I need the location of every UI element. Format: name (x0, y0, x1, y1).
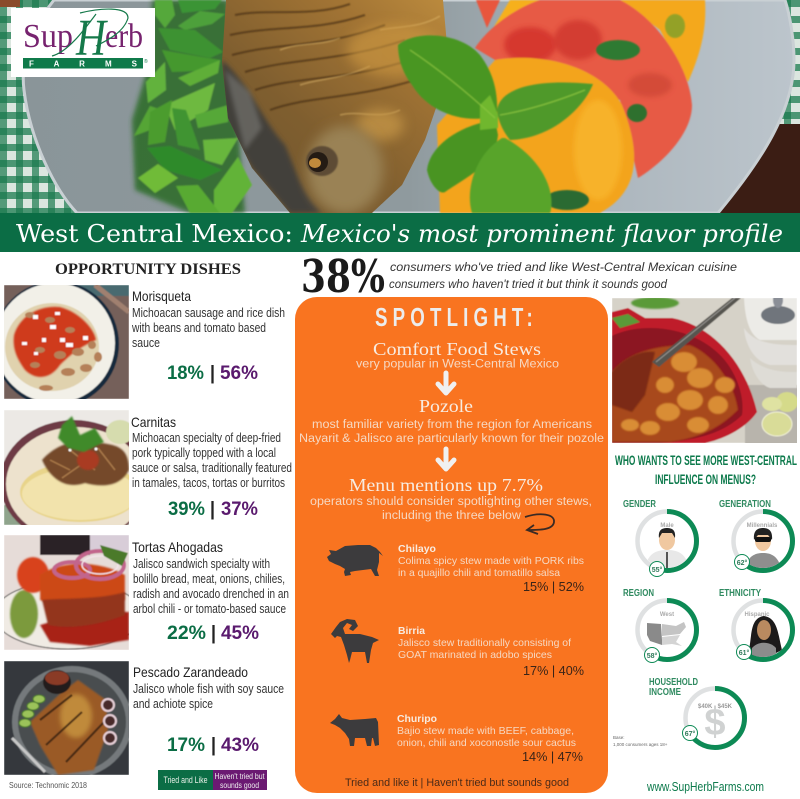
donut: ethnicity 61% hispanic: 61° (739, 649, 749, 657)
description: Tortas Ahogadas: Jalisco sandwich specialty with (133, 557, 270, 571)
photo: Tortas Ahogadas (4, 535, 129, 650)
stat: 18% | 56% (167, 363, 258, 384)
text: Churipo (397, 713, 576, 749)
stat captions: consumers who haven't tried it but think it sounds good (389, 277, 667, 291)
legend: tried and like / haven't tried: Haven't tried but (214, 771, 265, 781)
basil (398, 35, 593, 213)
description: Pescado Zarandeado: Jalisco whole fish with soy sauce (133, 682, 284, 696)
donut: household income 67%: HOUSEHOLD (649, 677, 698, 688)
donut: gender 55% male (623, 499, 696, 576)
arrow down (438, 449, 454, 469)
panel: spotlight (295, 297, 608, 793)
description: Carnitas: in tamales, tacos, tortas or burritos (132, 476, 285, 490)
text: Birria: Birria (398, 625, 425, 637)
description: Morisqueta (131, 306, 285, 350)
icon: cow (330, 714, 379, 746)
name: Morisqueta: Morisqueta (132, 288, 191, 304)
stat: 17% | 43%: 43% (221, 735, 259, 756)
legend: tried and like / haven't tried (158, 770, 267, 790)
dish: Morisqueta (4, 285, 284, 399)
stat: 17% | 43%: | (211, 735, 216, 756)
donut: region 58% west: West (660, 612, 674, 618)
website url: www.SupHerbFarms.com (646, 779, 764, 794)
photo: Carnitas (4, 410, 129, 525)
stat captions (389, 260, 737, 291)
description: Carnitas: pork typically topped with a local (132, 446, 276, 460)
stew: Churipo (330, 713, 583, 764)
legend: tried and like / haven't tried: Tried and Like (164, 775, 208, 785)
stat: 18% | 56%: 18% (167, 363, 204, 384)
photo: Morisqueta (4, 285, 129, 399)
donut: household income 67%: $ (704, 702, 726, 744)
donut: ethnicity 61% hispanic (719, 588, 792, 660)
stat: Churipo: 14% | 47% (522, 749, 583, 764)
description: Pescado Zarandeado (133, 682, 284, 711)
description: Morisqueta: with beans and tomato based (131, 321, 266, 335)
name: Tortas Ahogadas: Tortas Ahogadas (132, 539, 223, 555)
donut: gender 55% male: GENDER (623, 499, 657, 510)
stat: Chilayo: 15% | 52% (523, 579, 584, 594)
stew: Chilayo (327, 543, 584, 594)
dish: Pescado Zarandeado (4, 661, 284, 778)
text: Churipo: onion, chili and xoconostle sour cactus (397, 737, 576, 749)
stew: Birria (331, 619, 584, 678)
menu mentions: Menu mentions up 7.7% (349, 475, 543, 495)
stat: 18% | 56%: 56% (220, 363, 258, 384)
text: Churipo: Bajio stew made with BEEF, cabbage, (397, 725, 574, 737)
donut: generation 62% millennials: Millennials (747, 523, 778, 529)
text: Birria: GOAT marinated in adobo spices (398, 649, 552, 661)
chart heading: who wants to see more (615, 452, 797, 487)
name: Pescado Zarandeado: Pescado Zarandeado (133, 664, 248, 680)
legend: tried and like / haven't tried: sounds good (220, 780, 259, 790)
stat: 22% | 45%: | (211, 623, 216, 644)
text: Chilayo: Colima spicy stew made with PORK ribs (398, 555, 584, 567)
pozole (299, 396, 604, 445)
donut: household income 67%: $40K - $45K (698, 704, 733, 710)
donut: ethnicity 61% hispanic: Hispanic (744, 612, 770, 618)
stat: Birria: 17% | 40% (523, 663, 584, 678)
donut: region 58% west: REGION (623, 588, 654, 599)
fish (215, 0, 455, 214)
curved arrow (525, 514, 554, 534)
headline stat: 38% (301, 250, 737, 303)
donut: generation 62% millennials (719, 499, 792, 570)
donut: household income 67%: 67° (685, 730, 695, 738)
donut: region 58% west (623, 588, 696, 662)
stat: 18% | 56%: | (210, 363, 215, 384)
stat: 22% | 45% (167, 623, 259, 644)
donut: generation 62% millennials: 62° (737, 559, 747, 567)
icon: pig (327, 545, 383, 576)
hero photo: fried fish with tomato and basil (0, 0, 800, 214)
stat: 17% | 43% (167, 735, 259, 756)
text: Birria (398, 625, 571, 661)
name: Carnitas: Carnitas (131, 414, 176, 430)
description: Tortas Ahogadas: bolillo bread, meat, onions, chilies, (133, 572, 285, 586)
description: Tortas Ahogadas: radish and avocado drenched in an (133, 587, 289, 601)
description: Morisqueta: sauce (132, 336, 160, 350)
photo: Pescado Zarandeado (4, 661, 132, 778)
stat: 22% | 45%: 22% (167, 623, 206, 644)
donut: generation 62% millennials: GENERATION (719, 499, 771, 510)
pozole: most familiar variety from the region for Americans (312, 419, 592, 431)
pot (612, 308, 757, 443)
comfort food stews: very popular in West-Central Mexico (356, 358, 559, 370)
base note: Base: (613, 735, 625, 740)
logo: SupHerb Farms (11, 8, 155, 77)
title banner (0, 213, 800, 252)
stat: 22% | 45%: 45% (221, 623, 259, 644)
heading: opportunity dishes: OPPORTUNITY DISHES (55, 261, 241, 278)
base note (613, 735, 668, 747)
description: Carnitas (132, 431, 292, 490)
stat: 39% | 37%: 37% (221, 499, 258, 520)
logo: SupHerb Farms: Sup (23, 18, 73, 55)
text: Chilayo (398, 543, 584, 579)
source note: Source: Technomic 2018 (9, 780, 87, 790)
pozole: Nayarit & Jalisco are particularly known for their pozole (299, 433, 604, 445)
text: Chilayo: Chilayo (398, 543, 436, 555)
text: Chilayo: in a quajillo chili and tomatillo salsa (398, 567, 560, 579)
donut: household income 67%: INCOME (649, 687, 681, 698)
logo: SupHerb Farms: H (75, 10, 108, 67)
menu mentions: operators should consider spotlighting other stews, (310, 496, 592, 508)
description: Tortas Ahogadas: arbol chili - or tomato-based sauce (133, 602, 286, 616)
menu mentions: including the three below (382, 510, 522, 522)
logo: SupHerb Farms: F A R M S (29, 60, 138, 68)
stat: 39% | 37%: 39% (168, 499, 205, 520)
description: Pescado Zarandeado: and achiote spice (133, 697, 213, 711)
donut: household income 67% (649, 677, 744, 748)
icon: goat (331, 619, 379, 663)
description: Carnitas: Michoacan specialty of deep-fried (132, 431, 281, 445)
description: Carnitas: sauce or salsa, traditionally featured (132, 461, 292, 475)
donut: gender 55% male: 55° (652, 566, 662, 574)
base note: 1,000 consumers ages 18+ (613, 742, 668, 747)
headline stat: 38%: 38% (301, 250, 385, 303)
tomatoes (437, 0, 705, 213)
logo: SupHerb Farms: ® (144, 58, 148, 65)
comfort food stews: Comfort Food Stews (373, 339, 541, 359)
title banner: West Central Mexico: (16, 220, 293, 248)
menu mentions (310, 475, 592, 522)
ladle handle (652, 298, 741, 367)
spotlight heading: SPOTLIGHT: (375, 302, 533, 332)
stat: 39% | 37% (168, 499, 258, 520)
arrow down (438, 373, 454, 393)
stat: 39% | 37%: | (210, 499, 215, 520)
green onions (132, 0, 252, 213)
photo: pozole stew in red pot (612, 292, 800, 445)
text: Churipo: Churipo (397, 713, 437, 725)
spotlight legend: Tried and like it | Haven't tried but sounds good (345, 777, 569, 789)
description: Morisqueta: Michoacan sausage and rice dish (132, 306, 285, 320)
description: Tortas Ahogadas (133, 557, 289, 616)
comfort food stews (356, 339, 559, 370)
dish: Tortas Ahogadas (0, 535, 289, 650)
pozole: Pozole (419, 396, 473, 416)
bowls (744, 298, 797, 340)
donut: region 58% west: 58° (647, 652, 657, 660)
dish: Carnitas (4, 410, 292, 525)
title banner: Mexico's most prominent flavor profile (300, 220, 783, 248)
logo: SupHerb Farms: erb (105, 18, 143, 55)
text: Birria: Jalisco stew traditionally consisting of (398, 637, 571, 649)
stat: 17% | 43%: 17% (167, 735, 205, 756)
donut: ethnicity 61% hispanic: ETHNICITY (719, 588, 761, 599)
donut: gender 55% male: Male (660, 523, 674, 529)
stat captions: consumers who've tried and like West-Central Mexican cuisine (390, 260, 737, 274)
limes on foil (745, 385, 800, 445)
